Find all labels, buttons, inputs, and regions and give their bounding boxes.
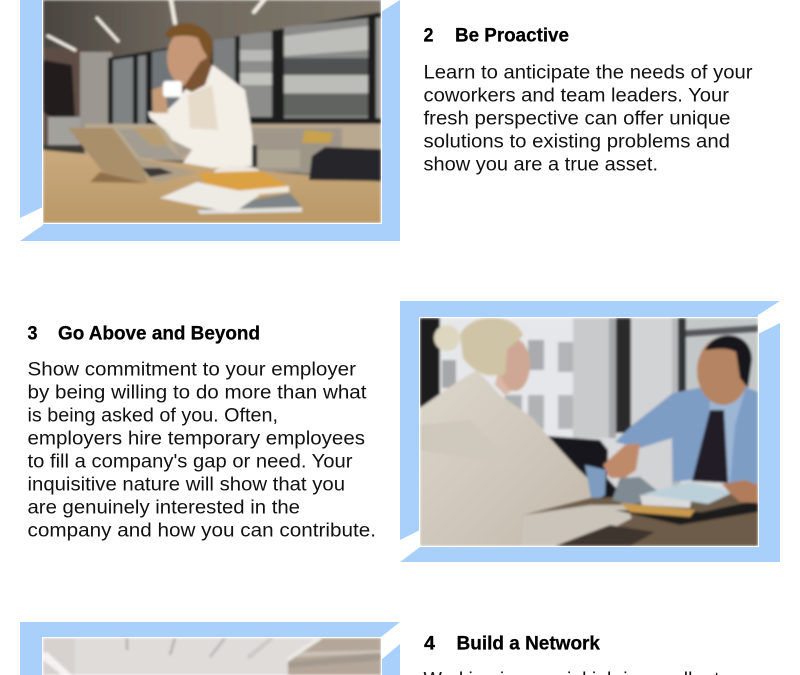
text block: be proactive body: Learn to anticipate the needs of your	[424, 62, 753, 84]
heading: 3 Go Above and Beyond: Go Above and Beyond	[58, 322, 260, 344]
panel: photo frame 3	[20, 622, 400, 675]
heading: 2 Be Proactive: Be Proactive	[455, 24, 569, 46]
panel: photo frame 1	[20, 0, 400, 241]
text block: go above and beyond body: are genuinely interested in the	[28, 498, 300, 518]
text block: be proactive body: coworkers and team leaders. Your	[424, 86, 730, 106]
heading: 4 Build a Network: Build a Network	[456, 632, 600, 654]
text block: be proactive body: show you are a true asset.	[424, 154, 658, 176]
text block: go above and beyond body: employers hire temporary employees	[28, 428, 365, 450]
photo: business handshake across a desk	[420, 318, 758, 546]
text block: be proactive body: solutions to existing problems and	[424, 132, 730, 152]
text block: go above and beyond body: to fill a company's gap or need. Your	[28, 452, 353, 472]
text block: go above and beyond body: by being willing to do more than what	[28, 382, 367, 404]
photo: bright white ceiling room	[43, 638, 381, 675]
text block: go above and beyond body: company and how you can contribute.	[28, 520, 376, 542]
text block: go above and beyond body: Show commitment to your employer	[28, 360, 357, 380]
text block: go above and beyond body: is being asked of you. Often,	[28, 406, 278, 426]
heading: 2 Be Proactive: 2	[424, 24, 434, 46]
panel: photo frame 2	[400, 301, 780, 562]
text block: be proactive body	[424, 62, 753, 176]
photo: man drinking coffee at laptop	[43, 0, 381, 223]
heading: 3 Go Above and Beyond: 3	[28, 322, 38, 344]
heading: 4 Build a Network: 4	[424, 632, 435, 654]
text block: go above and beyond body	[28, 360, 376, 542]
text block: be proactive body: fresh perspective can offer unique	[424, 108, 730, 130]
text block: go above and beyond body: inquisitive nature will show that you	[28, 474, 345, 496]
